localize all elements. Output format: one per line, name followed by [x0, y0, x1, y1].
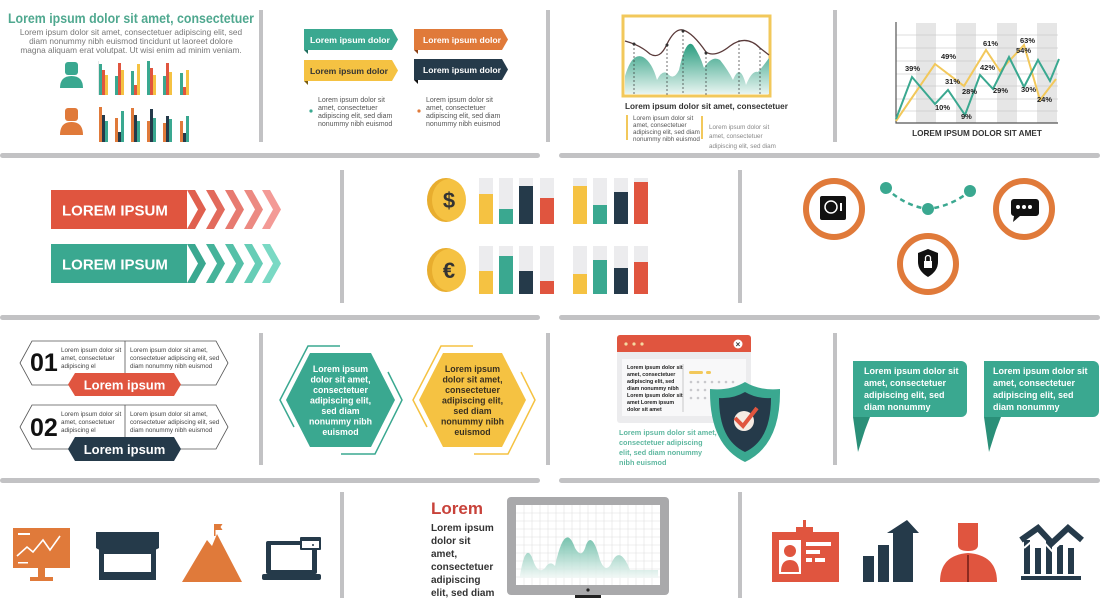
icon: shield check: [710, 382, 780, 462]
icon: orange person: [60, 108, 83, 135]
bar chart top: [98, 61, 189, 95]
step 02: 02: [30, 414, 58, 442]
ribbon navy: Lorem ipsum dolor: [423, 65, 502, 75]
panel: title with people bar charts: [8, 11, 255, 142]
value labels: 28%: [962, 87, 977, 96]
bars bottom: [479, 246, 648, 294]
value labels: 42%: [980, 63, 995, 72]
caption columns: amet, consectetuer: [633, 122, 687, 129]
hexagon teal: consectetuer: [313, 385, 368, 395]
area mountains: [625, 44, 769, 94]
bubble right: Lorem ipsum dolor sit: [993, 366, 1088, 376]
panel: security window: [617, 335, 780, 467]
bars top: [479, 178, 648, 224]
chart title: LOREM IPSUM DOLOR SIT AMET: [912, 129, 1042, 138]
icon: safe: [806, 181, 862, 237]
icon: mountain flag: [182, 524, 242, 582]
browser window: amet, consectetuer: [627, 372, 675, 378]
panel: monitor chart: [431, 497, 669, 598]
value labels: 9%: [961, 112, 972, 121]
paragraph: [20, 27, 243, 55]
ribbon orange: [414, 29, 508, 54]
caption: nibh euismod: [619, 458, 666, 467]
bubble left: Lorem ipsum dolor sit: [864, 366, 959, 376]
bubble left: [853, 361, 967, 452]
icon: shield lock: [900, 236, 956, 292]
text block left: amet, consectetuer: [318, 105, 378, 112]
step 02: diam nonummy nibh euismod: [130, 427, 213, 434]
hexagon yellow: nonummy nibh: [441, 416, 504, 426]
panel: business icons left: [13, 524, 321, 582]
step 01: adipiscing el: [61, 363, 96, 370]
panel: arrow banners: [51, 190, 281, 283]
caption columns: adipiscing elit, sed diam: [633, 129, 700, 136]
text block: Lorem ipsum: [431, 523, 494, 534]
step 01: Lorem ipsum dolor sit: [61, 347, 121, 354]
icon: dollar coin: $: [443, 188, 455, 213]
text block left: nonummy nibh euismod: [318, 121, 392, 128]
value labels: [905, 36, 1052, 121]
value labels: 49%: [941, 52, 956, 61]
panel: ribbons: [304, 29, 508, 128]
hexagon teal: Lorem ipsum: [313, 364, 368, 374]
icon: laptop: [262, 537, 321, 580]
value labels: 54%: [1016, 46, 1031, 55]
ribbon orange: Lorem ipsum dolor: [423, 35, 502, 45]
panel: security circles: [806, 181, 1052, 292]
ribbon teal: Lorem ipsum dolor: [310, 35, 391, 45]
paragraph: Lorem ipsum dolor sit amet, consectetuer adipiscing elit, sed: [20, 27, 243, 37]
text block right: adipiscing elit, sed diam: [426, 113, 500, 120]
yellow line: [896, 45, 1056, 121]
bubble left: diam nonummy: [864, 402, 931, 412]
text block: [431, 523, 494, 598]
text block right: nonummy nibh euismod: [426, 121, 500, 128]
step 02: consectetuer adipiscing elit, sed: [130, 419, 220, 426]
step 01: Lorem ipsum dolor sit amet,: [130, 347, 208, 354]
step 01: Lorem ipsum: [84, 378, 165, 392]
step 02: Lorem ipsum dolor sit amet,: [130, 411, 208, 418]
banner red: [51, 190, 281, 229]
caption columns: amet, consectetuer: [709, 133, 763, 140]
panel: currency bars: [427, 178, 648, 294]
teal line: [896, 57, 1059, 119]
bubble left: amet, consectetuer: [864, 378, 947, 388]
step 02: Lorem ipsum dolor sit: [61, 411, 121, 418]
browser window: Lorem ipsum dolor sit: [627, 393, 683, 399]
bar chart bottom: [99, 107, 189, 142]
value labels: 24%: [1037, 95, 1052, 104]
icon: euro coin: [427, 248, 466, 292]
hexagon teal: dolor sit amet,: [310, 374, 371, 384]
step 01: diam nonummy nibh euismod: [130, 363, 213, 370]
ribbon yellow: Lorem ipsum dolor: [310, 66, 389, 76]
text block right: Lorem ipsum dolor sit: [426, 97, 493, 104]
icon: growth bars: [863, 520, 919, 582]
caption: [619, 428, 717, 467]
hexagon yellow: sed diam: [453, 406, 492, 416]
text block: adipiscing: [431, 575, 480, 586]
value labels: 31%: [945, 77, 960, 86]
step 02: adipiscing el: [61, 427, 96, 434]
icon: chat: [996, 181, 1052, 237]
text block: amet,: [431, 549, 457, 560]
text block right: amet, consectetuer: [426, 105, 486, 112]
bubble right: adipiscing elit, sed: [993, 390, 1074, 400]
chart title: Lorem ipsum dolor sit amet, consectetuer: [625, 102, 789, 111]
hexagon yellow: euismod: [454, 427, 491, 437]
step 01: [20, 341, 228, 396]
step 02: Lorem ipsum: [84, 442, 165, 457]
text block right: [417, 97, 500, 128]
bubble right: [984, 361, 1099, 452]
bubble left: adipiscing elit, sed: [864, 390, 945, 400]
banner teal: [51, 244, 281, 283]
browser window: diam nonummy nibh: [627, 386, 679, 392]
browser window: dolor sit amet: [627, 407, 662, 413]
hexagon yellow: Lorem ipsum: [445, 364, 500, 374]
caption: elit, sed diam nonummy: [619, 448, 703, 457]
step 02: [20, 405, 228, 461]
ribbon navy: [414, 59, 508, 84]
icon: down chart: [1021, 528, 1082, 580]
browser window: Lorem ipsum dolor sit: [627, 365, 683, 371]
wave line: [625, 30, 769, 56]
browser window: ×: [736, 340, 741, 349]
browser window: adipiscing elit, sed: [627, 379, 674, 385]
dotted connector: [880, 182, 976, 215]
icon: euro coin: €: [443, 258, 455, 283]
value labels: 39%: [905, 64, 920, 73]
text block: dolor sit: [431, 536, 471, 547]
caption columns: Lorem ipsum dolor sit: [709, 124, 769, 131]
caption: Lorem ipsum dolor sit amet,: [619, 428, 717, 437]
text block left: [309, 97, 392, 128]
text block: consectetuer: [431, 562, 493, 573]
icon: store: [96, 532, 159, 580]
ribbon teal: [304, 29, 398, 54]
browser window: [617, 335, 751, 423]
value labels: 63%: [1020, 36, 1035, 45]
hexagon teal: [280, 346, 402, 454]
value labels: 30%: [1021, 85, 1036, 94]
grid: [896, 22, 1058, 123]
icon: teal person: [60, 62, 83, 88]
caption columns: adipiscing elit, sed diam: [709, 143, 776, 150]
step 02: amet, consectetuer: [61, 419, 115, 426]
hexagon yellow: consectetuer: [445, 385, 500, 395]
hexagon teal: sed diam: [321, 406, 360, 416]
paragraph: diam nonummy nibh euismod tincidunt ut laoreet dolore: [29, 36, 233, 46]
panel: hexagons: [280, 346, 535, 454]
step 01: 01: [30, 349, 58, 377]
caption columns: nonummy nibh euismod: [633, 136, 700, 143]
bubble right: amet, consectetuer: [993, 378, 1076, 388]
banner red: LOREM IPSUM: [62, 202, 168, 220]
icon: id card: [772, 520, 839, 582]
caption: consectetuer adipiscing: [619, 438, 703, 447]
heading: Lorem: [431, 499, 483, 518]
panel: business icons right: [772, 520, 1082, 582]
browser window: amet Lorem ipsum: [627, 400, 674, 406]
value labels: 10%: [935, 103, 950, 112]
panel: line chart: [896, 22, 1059, 138]
step 01: consectetuer adipiscing elit, sed: [130, 355, 220, 362]
panel: speech bubbles: [853, 361, 1099, 452]
chart frame: [623, 16, 770, 96]
ribbon yellow: [304, 60, 398, 85]
icon: dollar coin: [427, 178, 466, 222]
hexagon yellow: [413, 346, 535, 454]
panel: numbered steps: [20, 341, 228, 461]
caption columns: Lorem ipsum dolor sit: [633, 115, 693, 122]
icon: person red: [940, 523, 997, 582]
hexagon teal: adipiscing elit,: [310, 396, 371, 406]
monitor: [507, 497, 669, 598]
text block left: Lorem ipsum dolor sit: [318, 97, 385, 104]
value labels: 29%: [993, 86, 1008, 95]
bubble right: diam nonummy: [993, 402, 1060, 412]
hexagon teal: euismod: [322, 427, 359, 437]
caption columns: [626, 115, 776, 150]
title: Lorem ipsum dolor sit amet, consectetuer: [8, 11, 255, 26]
panel: wave chart: [623, 16, 789, 150]
value labels: 61%: [983, 39, 998, 48]
text block left: adipiscing elit, sed diam: [318, 113, 392, 120]
hexagon yellow: adipiscing elit,: [442, 396, 503, 406]
paragraph: magna aliquam erat volutpat. Ut wisi enim ad minim veniam.: [20, 45, 242, 55]
step 01: amet, consectetuer: [61, 355, 115, 362]
icon: monitor chart: [13, 528, 70, 581]
hexagon yellow: dolor sit amet,: [442, 374, 503, 384]
hexagon teal: nonummy nibh: [309, 416, 372, 426]
banner teal: LOREM IPSUM: [62, 256, 168, 274]
